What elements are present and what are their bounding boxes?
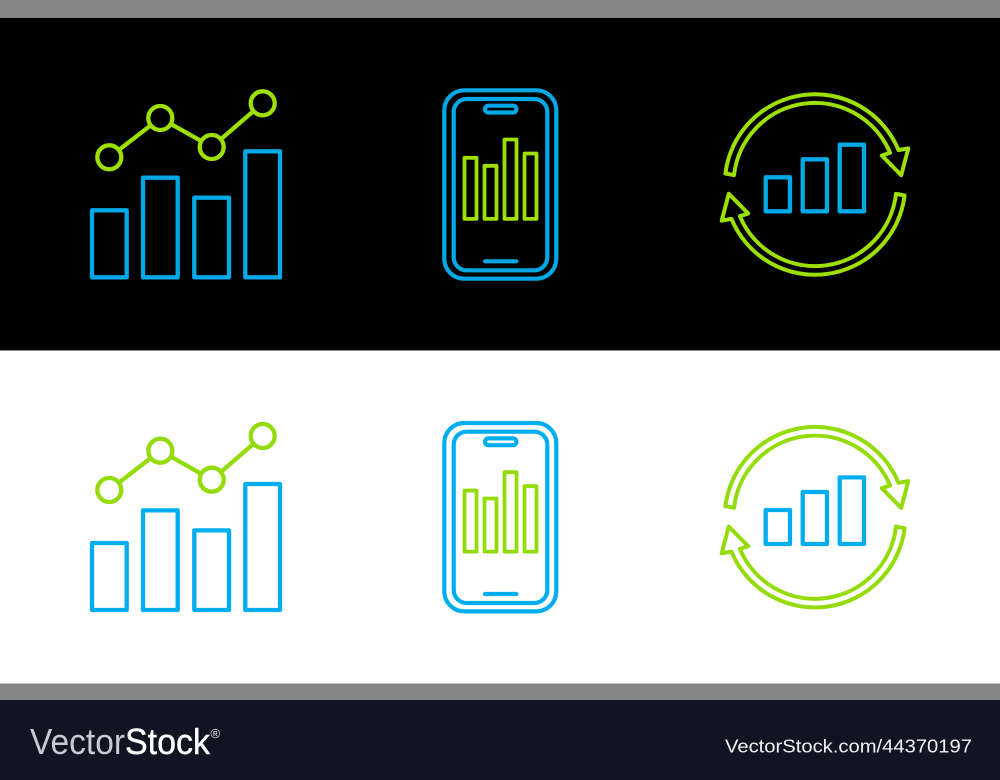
panel: white background row	[0, 350, 1000, 684]
icon: bar chart with trend line (dark)	[92, 91, 280, 277]
circular arrows	[722, 427, 908, 607]
phone body	[444, 423, 556, 611]
icon: refresh arrows with bars (dark)	[722, 94, 908, 275]
top grey band	[0, 0, 1000, 18]
green bars	[464, 140, 536, 219]
blue bars	[92, 484, 280, 610]
green trend line	[97, 91, 275, 169]
icon: bar chart with trend line (light)	[92, 424, 280, 610]
registered mark: ®	[210, 726, 220, 741]
blue bars	[766, 477, 864, 544]
icon: smartphone with bars (dark)	[444, 90, 556, 279]
icon: refresh arrows with bars (light)	[722, 427, 908, 607]
blue bars	[766, 145, 864, 211]
panel: black background row	[0, 18, 1000, 350]
green bars	[464, 472, 536, 552]
logo wordmark: Vector	[30, 721, 125, 762]
footer bar	[0, 700, 1000, 780]
phone body	[444, 90, 556, 279]
lower grey band	[0, 684, 1000, 700]
logo wordmark bold part: Stock	[125, 721, 211, 762]
image id: VectorStock.com/44370197	[725, 736, 972, 756]
green trend line	[97, 424, 275, 502]
circular arrows	[722, 94, 908, 275]
icon: smartphone with bars (light)	[444, 423, 556, 611]
blue bars	[92, 151, 280, 277]
